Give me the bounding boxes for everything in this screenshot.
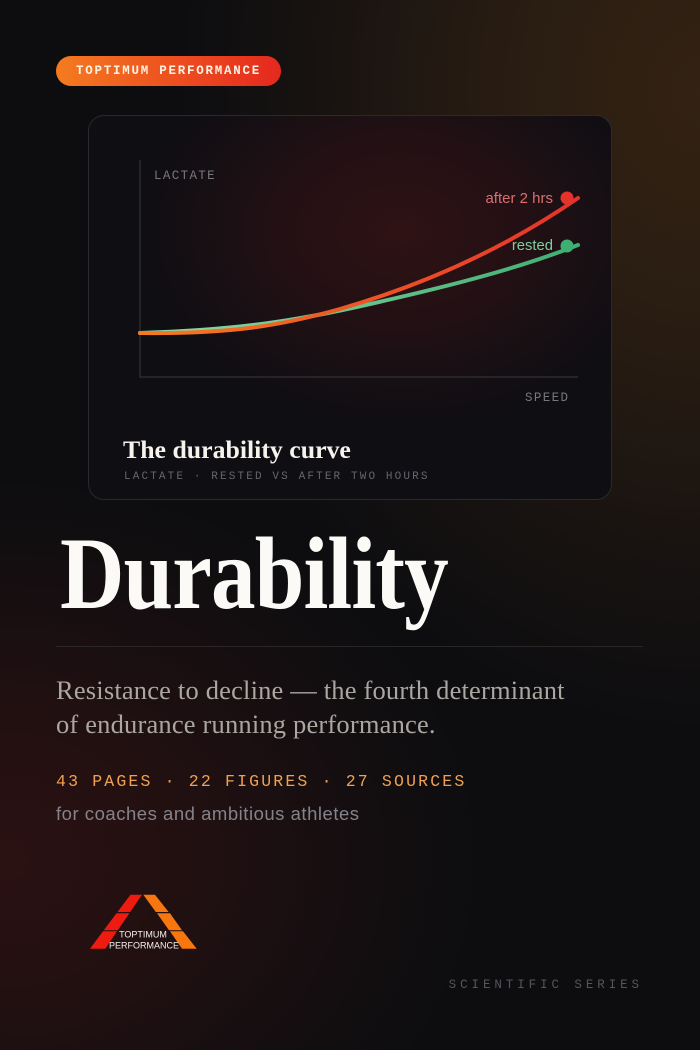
axes <box>140 160 578 377</box>
card subheading: LACTATE · RESTED VS AFTER TWO HOURS <box>124 471 430 483</box>
logo text: PERFORMANCE <box>109 940 179 950</box>
logo text <box>109 930 179 950</box>
series label: SCIENTIFIC SERIES <box>449 978 643 992</box>
divider <box>56 646 643 647</box>
logo right bars <box>143 895 197 949</box>
axis label: lactate: LACTATE <box>154 169 216 183</box>
subtitle: of endurance running performance. <box>56 709 436 739</box>
line chart: lactate vs speed <box>138 160 580 405</box>
audience line: for coaches and ambitious athletes <box>56 803 360 824</box>
panel: durability curve chart card <box>88 115 612 500</box>
marker: rested <box>560 240 574 252</box>
badge: Toptimum Performance: TOPTIMUM PERFORMANCE <box>76 64 261 78</box>
logo text: TOPTIMUM <box>119 930 167 940</box>
logo: Toptimum Performance <box>90 894 197 950</box>
subtitle: Resistance to decline — the fourth determinant <box>56 675 565 705</box>
label: after 2 hrs: after 2 hrs <box>485 190 553 207</box>
curve: after 2 hrs <box>140 198 578 333</box>
stats line: 43 PAGES · 22 FIGURES · 27 SOURCES <box>56 772 466 791</box>
badge: Toptimum Performance <box>56 56 281 86</box>
axis label: speed: SPEED <box>525 391 569 405</box>
marker: after 2 hrs <box>560 192 574 204</box>
label: rested: rested <box>512 238 553 254</box>
title: Durability <box>60 516 447 630</box>
subtitle <box>56 675 565 739</box>
card heading: The durability curve <box>123 435 351 464</box>
curve: rested <box>140 245 578 333</box>
logo left bars <box>90 895 142 949</box>
